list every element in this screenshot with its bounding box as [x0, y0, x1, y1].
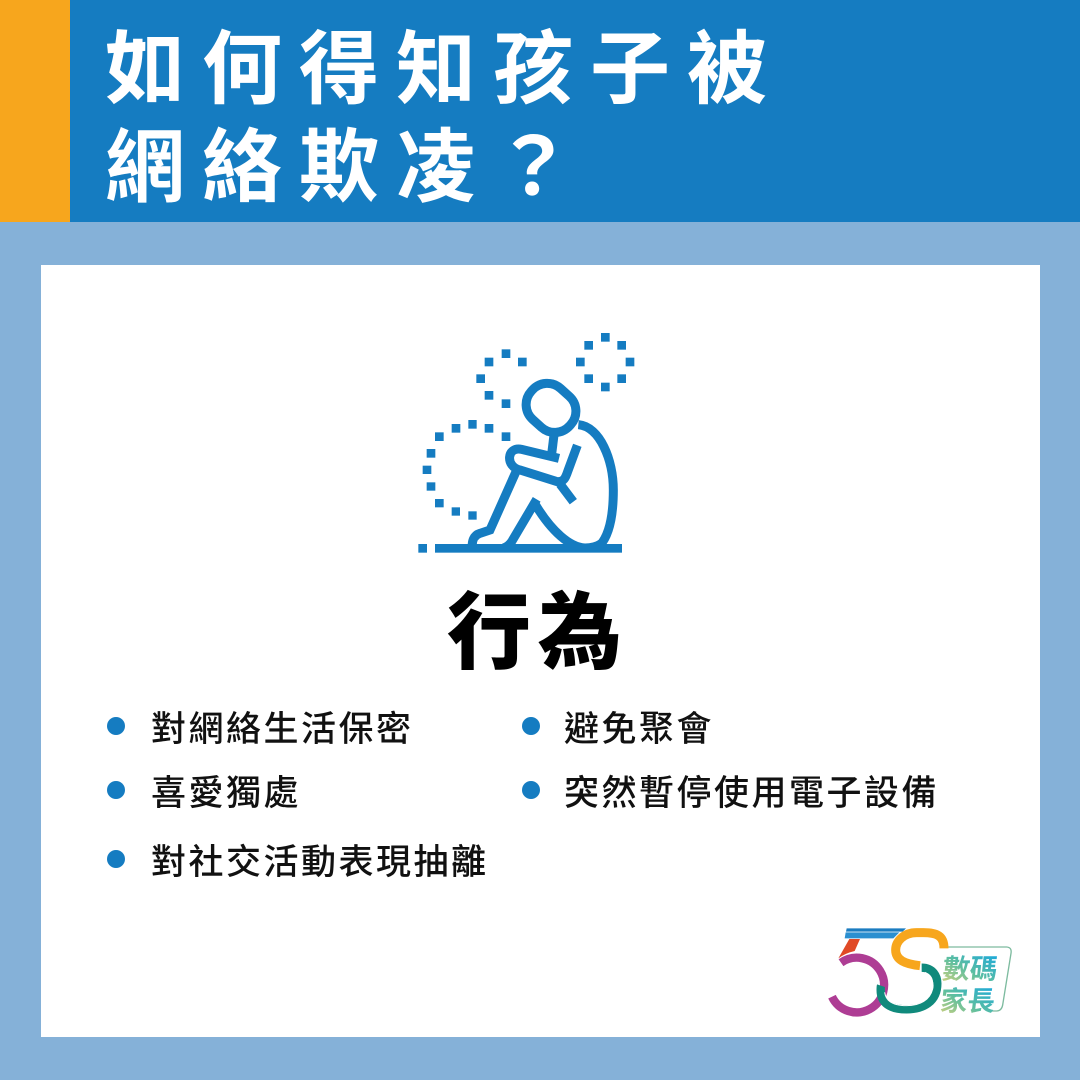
icon: sad person sitting alone	[418, 333, 634, 553]
bullet: keeps online life secret: 對網絡生活保密	[151, 710, 414, 749]
heading: behaviour: 行為	[447, 586, 629, 680]
logo: 50 digital parents	[828, 928, 1012, 1017]
bullet: avoids gatherings: 避免聚會	[564, 710, 714, 749]
white content panel	[41, 265, 1040, 1037]
bullet: likes being alone: 喜愛獨處	[151, 774, 301, 813]
header band	[0, 0, 1080, 222]
bullet: withdrawn from social activities: 對社交活動表現抽離	[151, 843, 489, 882]
orange accent block	[0, 0, 70, 222]
logo: 50 digital parents: 家長	[939, 986, 997, 1017]
logo: 50 digital parents: 數碼	[941, 953, 999, 984]
title	[105, 25, 784, 212]
bullet list	[107, 710, 939, 882]
title: 網絡欺凌？	[105, 123, 590, 212]
bullet: suddenly stops using devices: 突然暫停使用電子設備	[564, 774, 939, 813]
title: 如何得知孩子被	[105, 25, 784, 114]
